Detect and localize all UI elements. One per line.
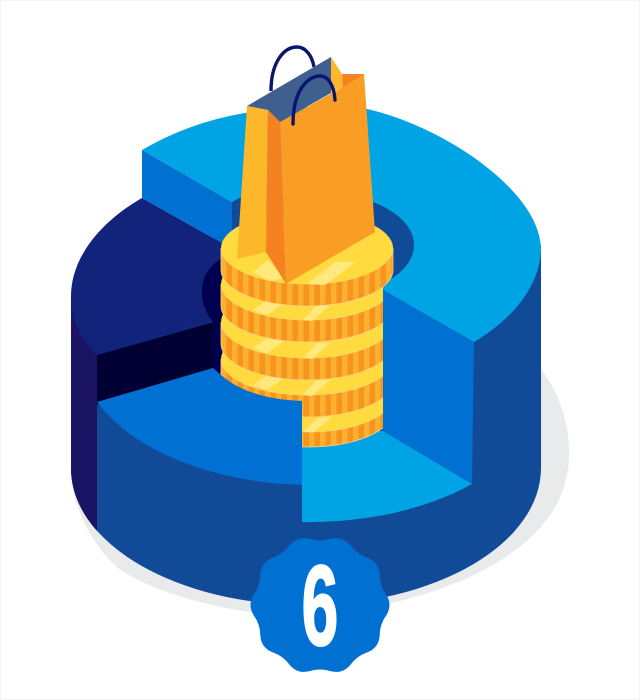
badge number: 6 xyxy=(302,541,338,669)
bag back panel xyxy=(342,74,364,88)
bag front handle xyxy=(293,76,335,124)
blue segment side face xyxy=(142,150,232,248)
coin 2 xyxy=(220,278,383,342)
number badge xyxy=(251,538,389,672)
coin 1 xyxy=(221,212,393,306)
pie chart xyxy=(71,107,541,605)
bag back handle xyxy=(271,47,314,91)
bottom light blue segment xyxy=(302,430,472,522)
blue segment top xyxy=(97,368,302,485)
ground shadow xyxy=(71,369,569,614)
light blue segment top xyxy=(142,107,541,342)
bag left gusset xyxy=(237,106,268,259)
right segment inner face xyxy=(383,290,474,484)
navy segment top xyxy=(71,198,225,355)
bag fold xyxy=(266,110,286,284)
badge scalloped shape xyxy=(251,538,389,672)
navy segment inner hole xyxy=(202,257,224,376)
cylinder body xyxy=(71,200,541,605)
bag interior xyxy=(247,57,331,122)
coin stack lower xyxy=(220,278,383,448)
coin 4 xyxy=(220,352,383,418)
bag front panel xyxy=(280,74,375,284)
coin 3 xyxy=(220,314,383,380)
body left dark strip xyxy=(71,296,97,531)
light blue segment inner hole xyxy=(226,193,414,297)
coin 5 xyxy=(259,388,383,448)
shopping bag xyxy=(237,47,375,284)
bag right gusset xyxy=(331,57,343,93)
navy segment front face xyxy=(97,322,213,405)
hole sliver beside bag xyxy=(232,195,245,255)
